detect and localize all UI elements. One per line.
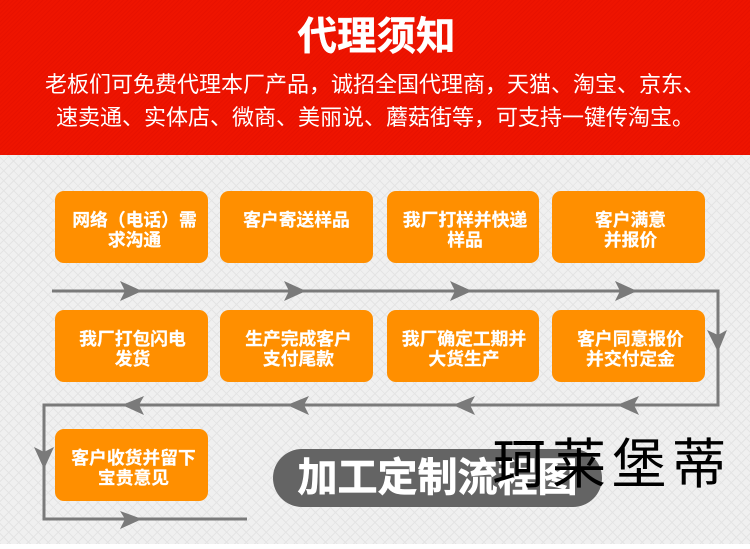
step 4: [552, 191, 705, 263]
step 7: 大货生产: [428, 349, 500, 369]
step 3: 我厂打样并快递: [403, 210, 527, 230]
step 6: 支付尾款: [263, 349, 334, 369]
step 8: 客户同意报价: [577, 329, 684, 349]
step 9: [55, 429, 208, 501]
step 4: 并报价: [604, 230, 657, 250]
text block: intro line 1: 老板们可免费代理本厂产品，诚招全国代理商，天猫、淘宝、京东、: [45, 72, 705, 97]
step 2: 客户寄送样品: [243, 210, 350, 230]
step 5: [55, 310, 208, 382]
step 8: 并交付定金: [586, 349, 675, 369]
step 7: [387, 310, 539, 382]
title: 代理须知: [298, 15, 456, 59]
step 6: 生产完成客户: [245, 329, 352, 349]
step 3: 样品: [447, 230, 483, 250]
heading pill: process chart: [273, 449, 602, 507]
patterned background: [0, 155, 750, 544]
step 2: [220, 191, 373, 263]
step 4: 客户满意: [595, 210, 666, 230]
heading pill: process chart: 加工定制流程图: [298, 456, 578, 500]
step 7: 我厂确定工期并: [402, 329, 526, 349]
step 9: 客户收货并留下: [71, 448, 196, 468]
step 5: 发货: [115, 349, 150, 369]
step 6: [220, 310, 373, 382]
brand watermark: 珂莱堡蒂: [492, 420, 732, 499]
step 8: [552, 310, 705, 382]
step 1: 求沟通: [108, 230, 161, 250]
step 3: [387, 191, 539, 263]
step 5: 我厂打包闪电: [79, 329, 186, 349]
step 1: 网络（电话）需: [72, 210, 197, 230]
panel: red header: [0, 0, 750, 155]
step 9: 宝贵意见: [98, 468, 169, 488]
text block: intro line 2: 速卖通、实体店、微商、美丽说、蘑菇街等，可支持一键传淘宝。: [56, 105, 694, 130]
step 1: [55, 191, 208, 263]
